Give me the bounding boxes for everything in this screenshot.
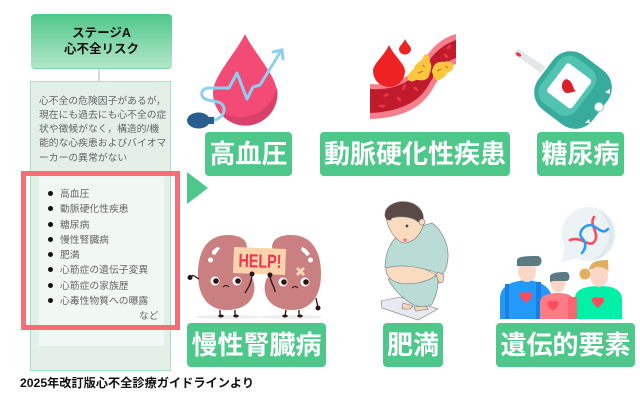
text block: risk factor list [48, 188, 159, 322]
icon: man on scale [381, 202, 448, 320]
text block: risk factor list: 心筋症の遺伝子変異 [60, 265, 148, 276]
label: obesity [383, 323, 443, 367]
label: diabetes [537, 132, 624, 176]
text block: risk factor list: 心筋症の家族歴 [60, 281, 129, 292]
text block: description: ーカーの異常がない [39, 153, 127, 164]
text block: description: 状や徴候がなく，構造的/機 [39, 124, 159, 135]
speech bubble [561, 207, 616, 262]
text block: risk factor list: 動脈硬化性疾患 [60, 204, 129, 215]
sign text: HELP! [238, 251, 282, 273]
text block: description: 心不全の危険因子があるが， [39, 96, 166, 107]
connector [98, 69, 100, 82]
label: genetic factors [496, 323, 635, 367]
heading: stage A: ステージA [72, 26, 131, 40]
panel: stage A body [30, 81, 171, 371]
icon: glucose meter [514, 42, 621, 138]
text block: risk factor list: 心毒性物質への曝露 [60, 296, 148, 307]
text block: risk factor list: 慢性腎臓病 [60, 235, 109, 246]
text block: risk factor list: 高血圧 [60, 189, 89, 200]
label: atherosclerosis: 動脈硬化性疾患 [324, 139, 506, 169]
text block: risk factor list: など [139, 311, 159, 322]
icon: family with DNA bubble [500, 207, 622, 319]
arrow [187, 172, 208, 204]
icon: kidneys holding help sign [188, 235, 323, 319]
label: obesity: 肥満 [387, 330, 439, 360]
heading: stage A: 心不全リスク [64, 42, 139, 56]
text block: risk factor list: 肥満 [60, 250, 80, 261]
label: genetic factors: 遺伝的要素 [500, 330, 630, 360]
icon: artery with plaque [370, 34, 456, 119]
label: chronic kidney disease: 慢性腎臓病 [191, 330, 322, 360]
father [500, 256, 553, 319]
label: chronic kidney disease [187, 323, 326, 367]
heading: stage A [31, 14, 172, 69]
text block: risk factor list: 糖尿病 [60, 220, 89, 231]
caption: 2025年改訂版心不全診療ガイドラインより [20, 376, 254, 390]
label: hypertension: 高血圧 [209, 139, 288, 169]
label: hypertension [205, 132, 292, 176]
icon: blood drop with pressure line [187, 34, 283, 128]
text block: description: 能的な心疾患およびバイオマ [39, 138, 166, 149]
child [540, 272, 577, 319]
text block: description: 現在にも過去にも心不全の症 [39, 110, 166, 121]
mother [575, 260, 622, 319]
highlight frame [21, 171, 180, 330]
label: diabetes: 糖尿病 [541, 139, 620, 169]
panel: risk factor list background [39, 176, 164, 346]
text block: description [39, 96, 166, 164]
label: atherosclerosis [320, 132, 510, 176]
